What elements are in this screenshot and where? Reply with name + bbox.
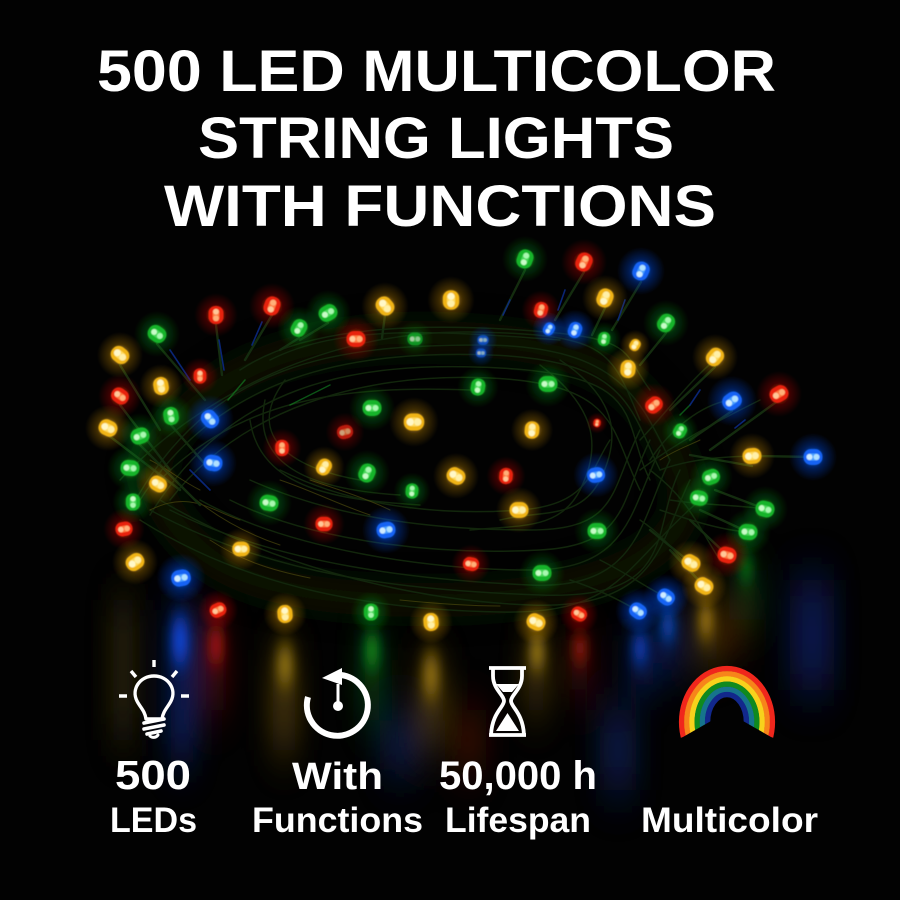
icon: light bulb xyxy=(119,660,189,737)
feature label: With Functions: With xyxy=(292,756,383,798)
feature label: 50,000 h Lifespan xyxy=(439,754,597,840)
title: 500 LED MULTICOLOR xyxy=(97,39,776,104)
feature label: 500 LEDs: 500 xyxy=(115,752,191,798)
feature label: 500 LEDs: LEDs xyxy=(110,801,197,840)
title: WITH FUNCTIONS xyxy=(164,174,716,239)
feature label: 50,000 h Lifespan: 50,000 h xyxy=(439,754,597,798)
icon: rainbow xyxy=(678,666,776,738)
icon: hourglass xyxy=(489,668,526,735)
upper left cluster xyxy=(88,273,475,453)
upper right cluster xyxy=(496,230,810,456)
stems xyxy=(108,270,813,586)
wire coil xyxy=(108,270,813,612)
bottom row lights xyxy=(261,590,455,646)
right cluster xyxy=(505,431,837,653)
feature label: 500 LEDs xyxy=(110,752,197,840)
feature label: Multicolor: Multicolor xyxy=(641,801,818,840)
LED lights xyxy=(77,230,837,653)
coil face lights xyxy=(220,316,622,596)
feature label: 50,000 h Lifespan: Lifespan xyxy=(445,801,591,840)
left cluster xyxy=(77,397,245,637)
feature label: With Functions: Functions xyxy=(252,801,423,840)
feature label: With Functions xyxy=(252,756,423,840)
icon: timer with return arrow xyxy=(307,668,368,736)
title: STRING LIGHTS xyxy=(198,106,674,171)
floor reflections of the lights xyxy=(112,553,834,790)
title xyxy=(97,39,776,239)
